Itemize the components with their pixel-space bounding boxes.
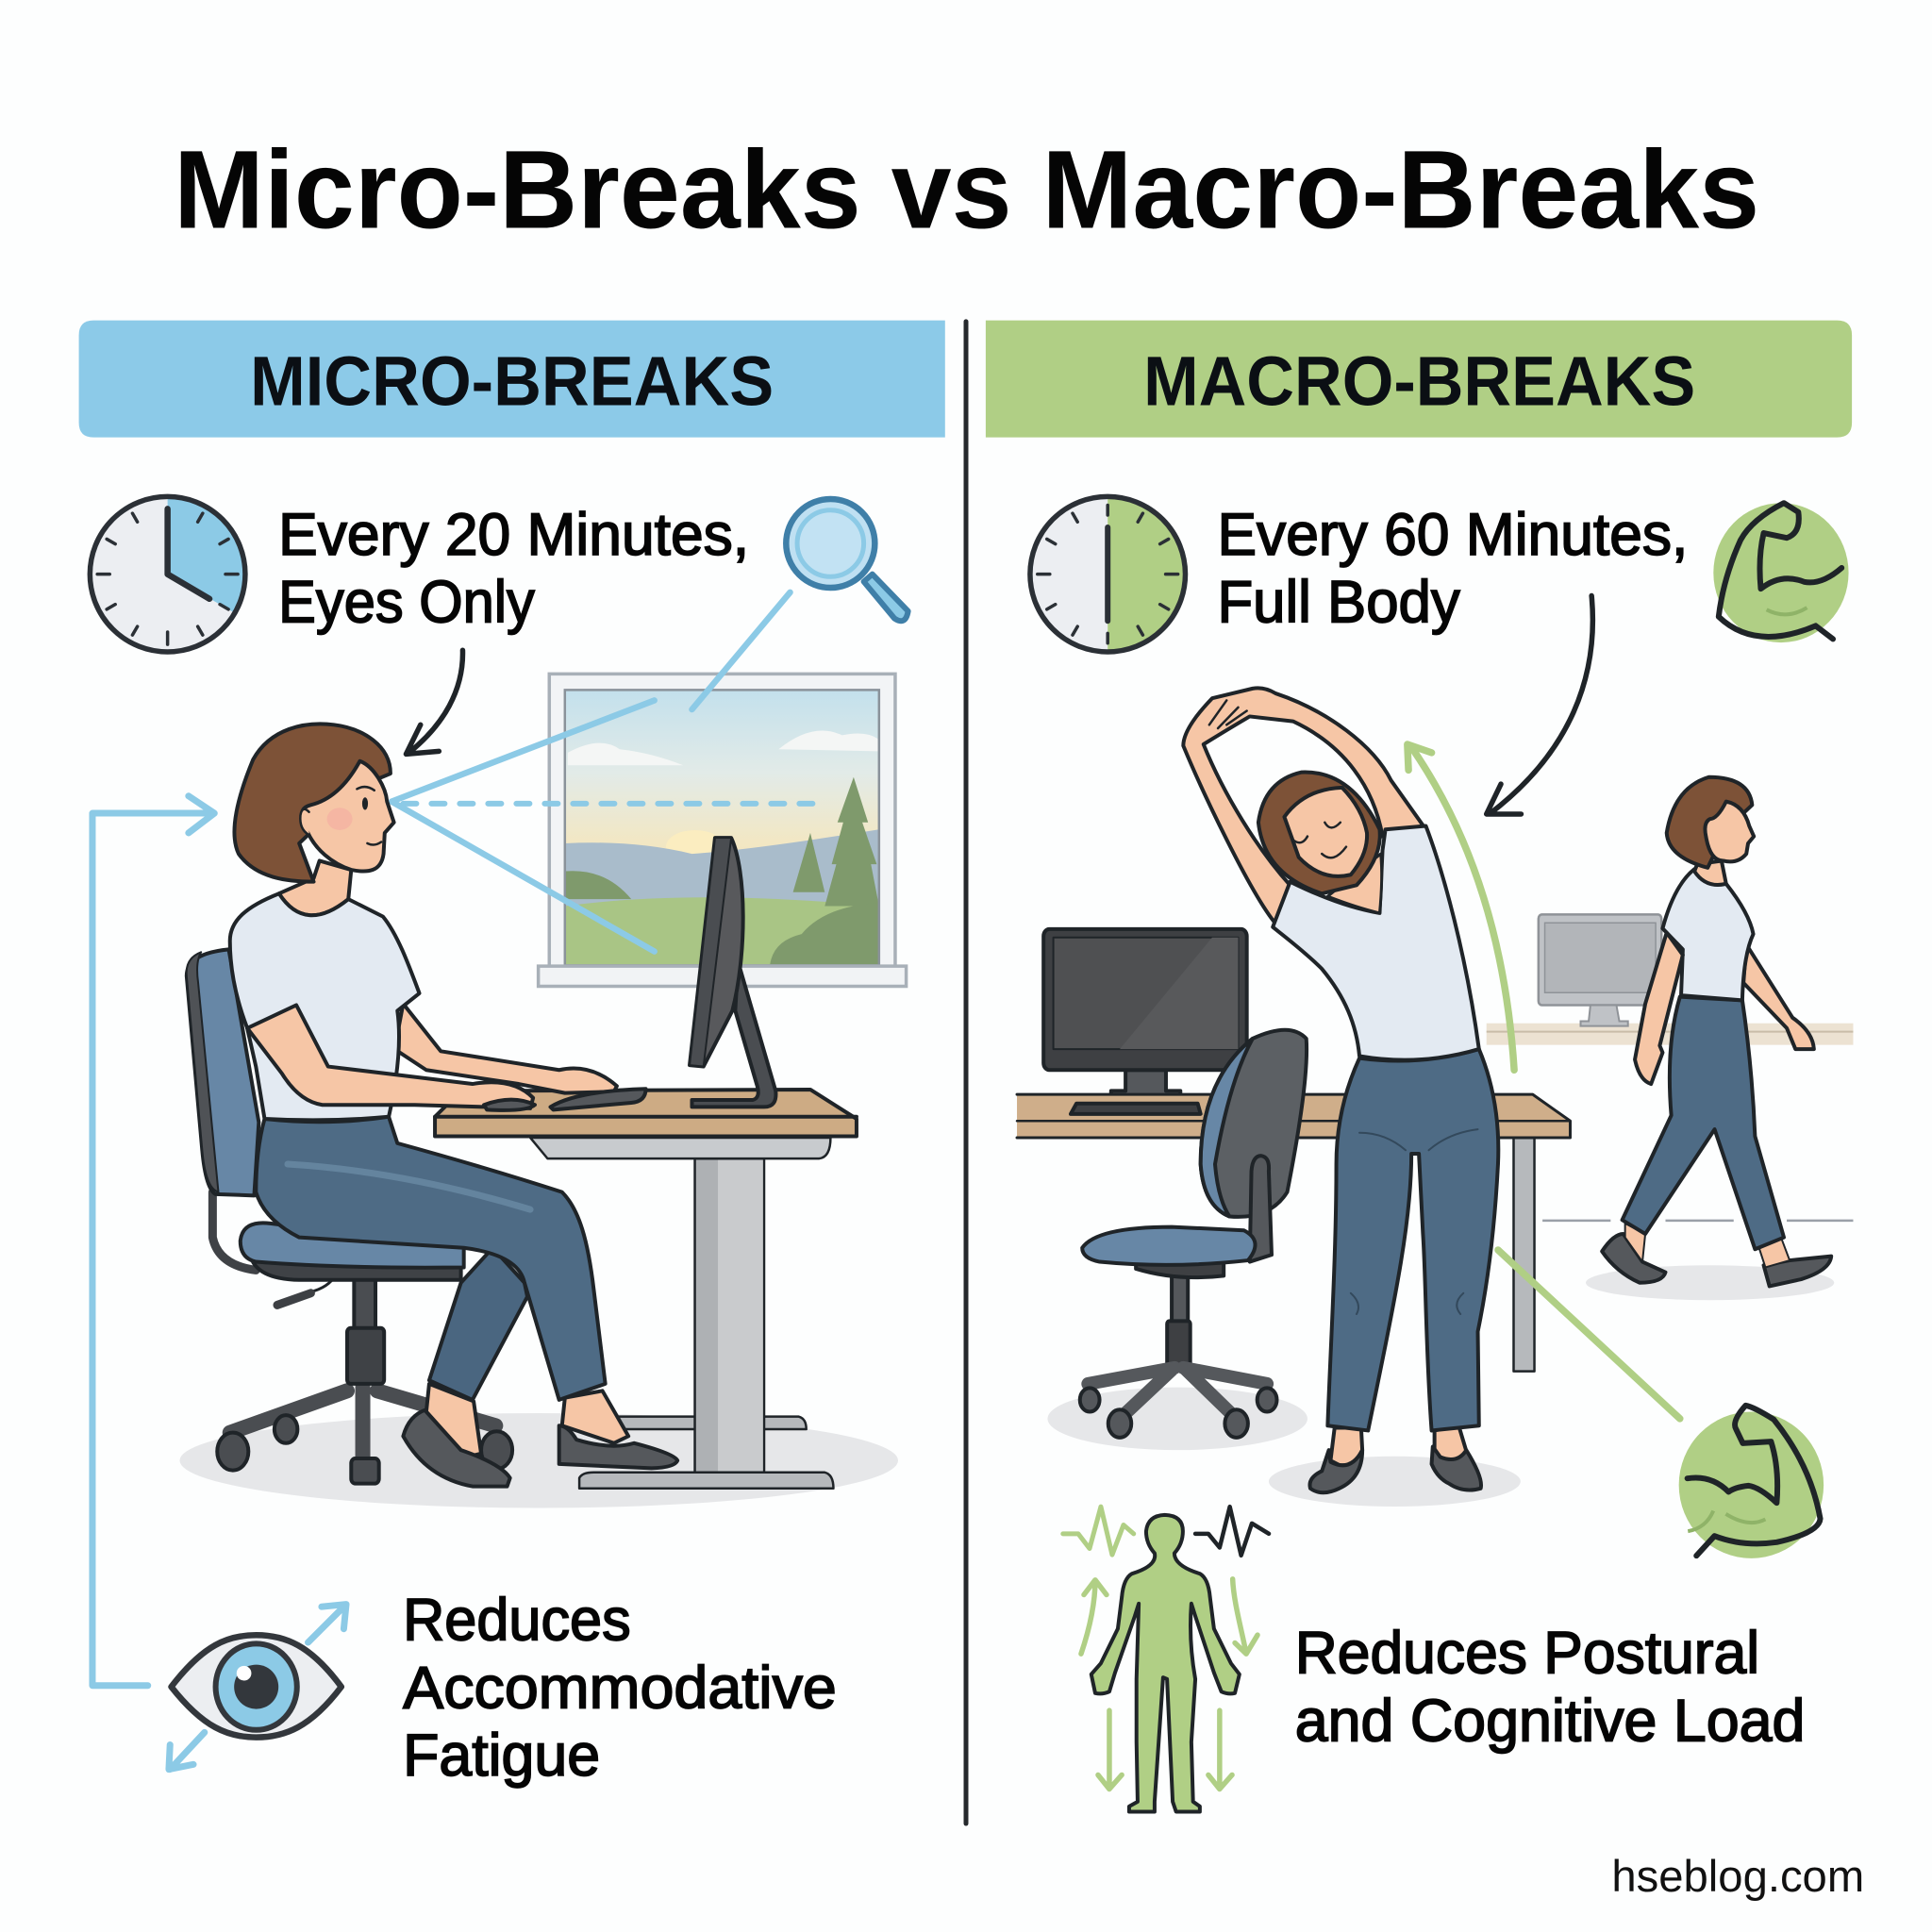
window with landscape	[539, 674, 907, 987]
woman walking	[1602, 777, 1831, 1286]
sight lines to window	[391, 592, 813, 952]
near arm and hand	[247, 1005, 533, 1108]
head	[1258, 773, 1380, 893]
floor shadows	[1047, 1265, 1834, 1507]
text: reduces postural and cognitive load: and Cognitive Load	[1295, 1689, 1805, 1755]
arrow: callout to head	[406, 650, 462, 754]
front arm	[1635, 933, 1683, 1084]
title: Micro-Breaks vs Macro-Breaks	[174, 128, 1759, 252]
desk	[435, 1090, 857, 1489]
black callout arrow	[1487, 596, 1592, 814]
monitor side view	[690, 838, 775, 1107]
office chair empty	[1080, 1030, 1307, 1438]
panel header: micro-breaks	[79, 321, 945, 438]
neck	[279, 860, 351, 915]
panel header: macro-breaks: MACRO-BREAKS	[1143, 342, 1695, 421]
text: reduces accommodative fatigue: Accommodative	[403, 1655, 837, 1721]
right illustration: stretching and walking	[1017, 503, 1853, 1507]
watermark: hseblog.com	[1611, 1851, 1864, 1901]
shirt	[1662, 869, 1754, 1000]
pants	[256, 1117, 606, 1400]
feedback arrow: eye to head	[92, 796, 214, 1686]
office chair	[187, 949, 512, 1484]
heartbeat lines	[1063, 1507, 1269, 1556]
text: reduces postural and cognitive load	[1295, 1621, 1805, 1755]
text: reduces accommodative fatigue: Fatigue	[403, 1723, 600, 1789]
body figure	[1091, 1515, 1240, 1811]
feet	[1309, 1427, 1481, 1492]
flow arrows	[1081, 1579, 1257, 1789]
text: every 20 minutes	[278, 502, 749, 636]
arms raised	[1183, 688, 1425, 927]
icon: clock 20 minutes	[90, 496, 245, 652]
face	[302, 761, 394, 872]
woman seated	[230, 724, 677, 1487]
neck	[1694, 860, 1726, 885]
text: every 60 minutes: Every 60 Minutes,	[1217, 502, 1688, 568]
shoes and ankles	[403, 1384, 677, 1487]
pants	[1327, 1049, 1498, 1430]
shirt	[1273, 826, 1479, 1060]
text: every 20 minutes: Eyes Only	[278, 570, 535, 636]
neck opening	[1327, 854, 1382, 913]
text: reduces accommodative fatigue	[403, 1587, 837, 1789]
woman side stretching	[1183, 688, 1498, 1492]
lower body and muscle icons	[1063, 1406, 1824, 1811]
left illustration: seated woman at desk	[179, 592, 907, 1508]
icon: eye with arrows	[169, 1605, 346, 1770]
panel header: macro-breaks	[986, 321, 1852, 438]
text: reduces postural and cognitive load: Reduces Postural	[1295, 1621, 1759, 1687]
text: every 20 minutes: Every 20 Minutes,	[278, 502, 749, 568]
floor shadow	[179, 1413, 898, 1508]
icon: clock 60 minutes	[1030, 496, 1185, 652]
foreground monitor	[1043, 929, 1247, 1098]
panel header: micro-breaks: MICRO-BREAKS	[250, 342, 774, 421]
icon: flexed arm lower	[1679, 1406, 1824, 1558]
far arm and hand	[394, 1004, 617, 1093]
back arm	[1743, 944, 1814, 1049]
pants	[1623, 997, 1784, 1249]
panel divider	[964, 322, 968, 1824]
stretch direction arrow	[1407, 744, 1514, 1070]
mouse and keyboard	[484, 1100, 535, 1110]
hair	[1667, 777, 1752, 868]
face	[1705, 802, 1754, 861]
icon: flexed arm top	[1713, 503, 1849, 642]
text: reduces accommodative fatigue: Reduces	[403, 1587, 631, 1653]
icon: magnifying glass	[786, 499, 908, 621]
shoes	[1602, 1234, 1665, 1283]
hair	[234, 724, 391, 882]
muscle link line	[1498, 1250, 1680, 1419]
shirt	[230, 893, 420, 1120]
background desk and monitor	[1487, 914, 1853, 1221]
text: every 60 minutes: Full Body	[1217, 570, 1460, 636]
text: every 60 minutes	[1217, 502, 1688, 636]
far leg	[429, 1248, 527, 1400]
foreground desk	[1017, 1094, 1570, 1372]
